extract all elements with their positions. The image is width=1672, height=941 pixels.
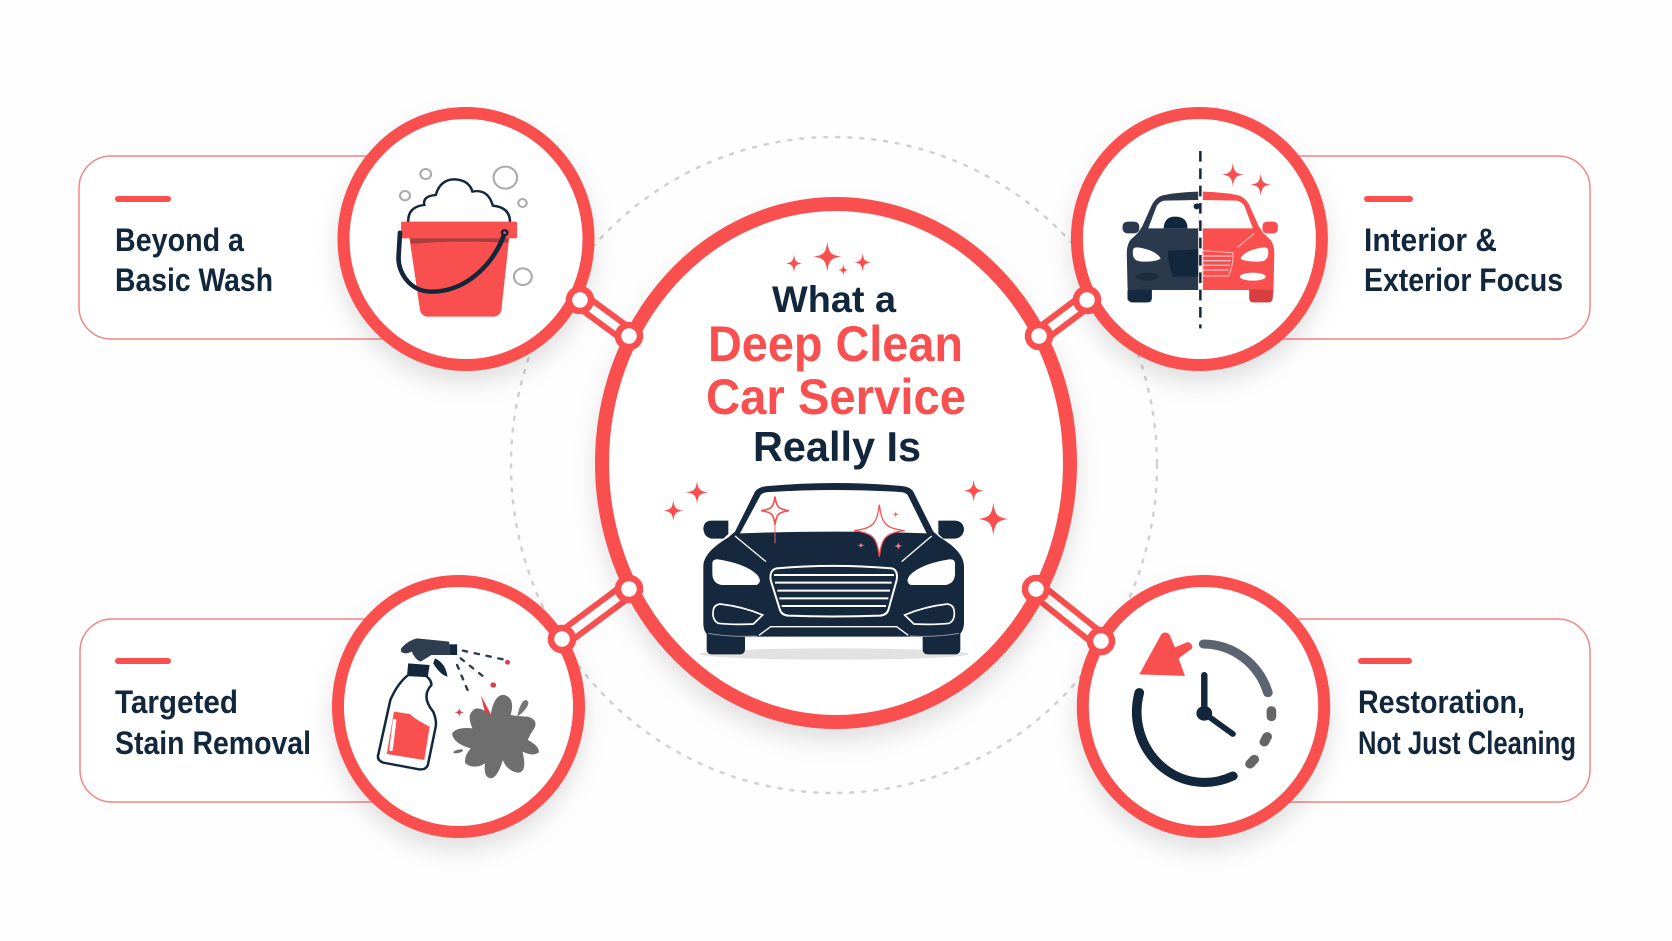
icon: spray bottle and stain bbox=[378, 638, 539, 778]
label: interior and exterior focus: Interior & bbox=[1364, 222, 1497, 258]
label: interior and exterior focus: Exterior Focus bbox=[1364, 262, 1563, 298]
label: beyond a basic wash: Beyond a bbox=[115, 222, 244, 258]
label: targeted stain removal: Targeted bbox=[115, 684, 238, 720]
label: targeted stain removal bbox=[115, 684, 311, 761]
card: top right bbox=[1180, 156, 1590, 339]
icon: clock with rewind arrow bbox=[1137, 633, 1271, 782]
label: restoration not just cleaning: Not Just Cleaning bbox=[1358, 725, 1576, 761]
panel: interior and exterior focus bbox=[1077, 113, 1590, 365]
central circle bbox=[602, 204, 1070, 722]
label: beyond a basic wash bbox=[115, 222, 273, 298]
accent bar bbox=[115, 196, 171, 202]
accent bar bbox=[1364, 196, 1413, 202]
panel: beyond a basic wash bbox=[79, 113, 588, 365]
label: targeted stain removal: Stain Removal bbox=[115, 725, 311, 761]
title: What a bbox=[772, 279, 896, 320]
circle: bottom right bbox=[1083, 581, 1324, 832]
central panel bbox=[602, 204, 1070, 722]
card: bottom left bbox=[80, 619, 490, 802]
label: restoration not just cleaning: Restoration, bbox=[1358, 684, 1525, 720]
circle: bottom left bbox=[338, 581, 579, 832]
label: beyond a basic wash: Basic Wash bbox=[115, 262, 273, 298]
circle: top right bbox=[1077, 113, 1322, 365]
connector: bottom left bbox=[551, 589, 629, 650]
circle: top left bbox=[344, 113, 588, 365]
label: interior and exterior focus bbox=[1364, 222, 1563, 298]
connector nodes on central circle bbox=[618, 325, 1050, 600]
connector: bottom right bbox=[1036, 589, 1112, 652]
panel: targeted stain removal bbox=[80, 581, 579, 832]
title: Deep Clean bbox=[708, 316, 963, 372]
connector: top left bbox=[569, 289, 629, 336]
icon: shiny car front view bbox=[663, 479, 1008, 660]
panel: restoration not just cleaning bbox=[1083, 581, 1590, 832]
icon: half navy half red car bbox=[1122, 151, 1278, 328]
label: restoration not just cleaning bbox=[1358, 684, 1576, 761]
dashed orbit ring bbox=[511, 137, 1157, 793]
title: Really Is bbox=[753, 423, 921, 470]
icon: bucket with foam bbox=[398, 167, 532, 317]
sparkles above title bbox=[786, 241, 871, 276]
accent bar bbox=[115, 658, 171, 664]
title: Car Service bbox=[706, 369, 966, 425]
accent bar bbox=[1358, 658, 1412, 664]
connector: top right bbox=[1039, 289, 1098, 336]
card: top left bbox=[79, 156, 489, 339]
title bbox=[706, 279, 966, 470]
card: bottom right bbox=[1180, 619, 1590, 802]
